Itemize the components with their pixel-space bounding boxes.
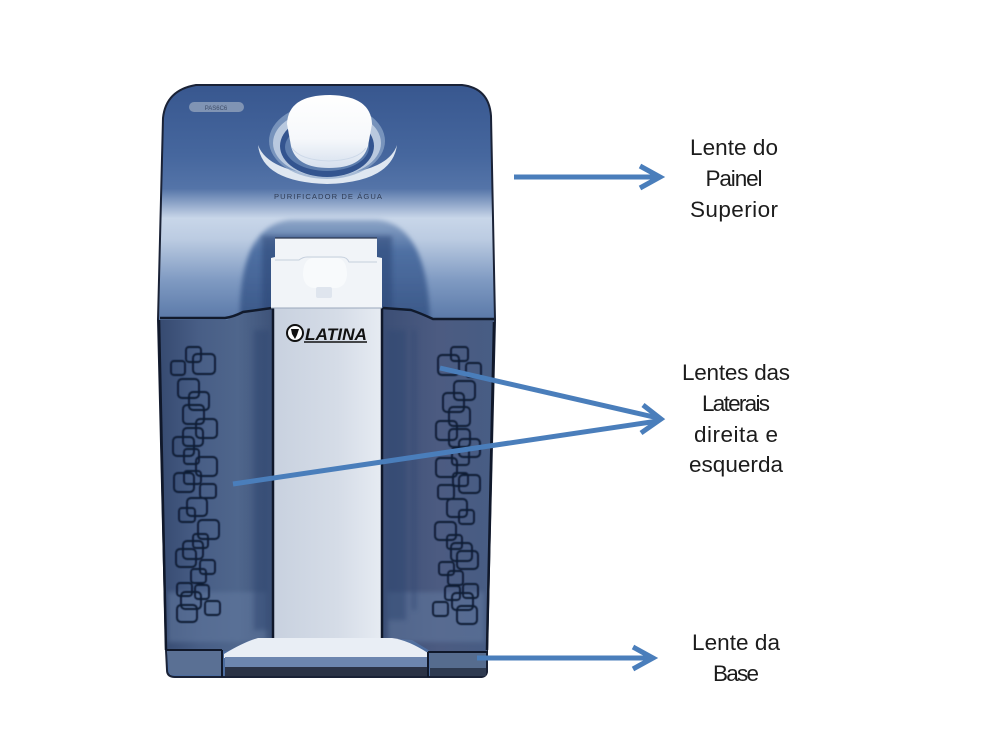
dispenser tap: [271, 238, 382, 308]
label: base lens: Base: [713, 661, 759, 686]
water purifier product illustration: [158, 85, 495, 677]
label: base lens: Lente da: [692, 630, 780, 655]
lens outer edge right: [487, 322, 494, 650]
label: side lenses: direita e: [694, 422, 778, 447]
label: top panel lens: Lente do: [690, 135, 778, 160]
lower lens band: [168, 592, 484, 642]
arrow: top panel lens: [514, 166, 660, 188]
label: base lens: [692, 630, 780, 686]
seam line right: [383, 308, 494, 319]
Latina logo: LATINA: [305, 325, 367, 344]
seam line left: [160, 308, 272, 318]
label: side lenses: Laterais: [702, 391, 770, 416]
model badge: PAS6C6: [205, 106, 228, 112]
lens outer edge left: [159, 320, 166, 650]
right side lens panel: [382, 309, 494, 651]
central white column: [273, 308, 381, 638]
column edge lines: [273, 308, 382, 638]
purifier body: [158, 85, 495, 677]
base front left: [167, 651, 221, 675]
shadow beside dispenser: [262, 236, 392, 312]
base front right: [430, 652, 486, 668]
decorative squares, right side: [433, 347, 481, 624]
model badge: [189, 102, 244, 112]
left side lens panel: [159, 309, 272, 651]
label: top panel lens: Superior: [690, 197, 778, 222]
product label: PURIFICADOR DE ÁGUA: [274, 192, 383, 201]
label: side lenses: Lentes das: [682, 360, 790, 385]
label: side lenses: esquerda: [689, 452, 783, 477]
arrow: base lens: [477, 647, 653, 669]
label: top panel lens: [690, 135, 778, 222]
base separators: [166, 650, 488, 677]
label: top panel lens: Painel: [706, 166, 762, 191]
side panel soft folds: [254, 330, 416, 630]
label: side lenses: [682, 360, 790, 477]
base front centre: [225, 657, 427, 667]
base tray: [224, 638, 428, 658]
decorative squares, left side: [171, 347, 220, 622]
arrows: side lenses: [233, 368, 661, 484]
arch around dispenser: [240, 220, 430, 322]
water filter cap: [258, 95, 397, 184]
